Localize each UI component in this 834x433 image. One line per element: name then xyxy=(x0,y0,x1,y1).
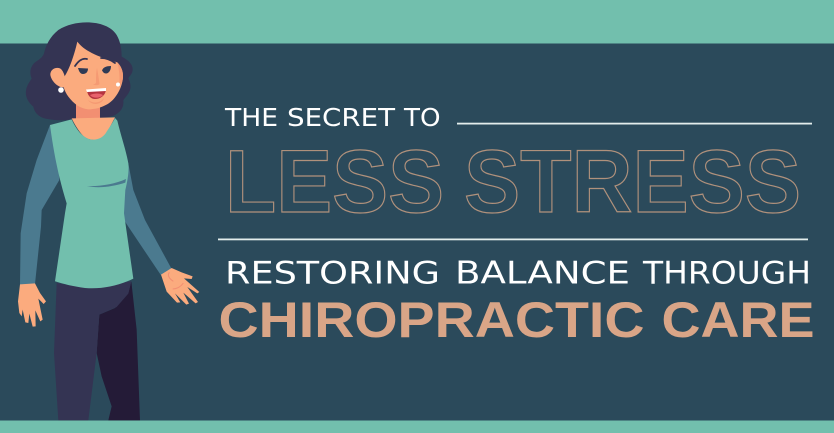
headline: the secret to xyxy=(224,103,440,132)
subheading: chiropractic care: CARE xyxy=(662,291,814,348)
subheading: restoring balance through: THROUGH xyxy=(642,256,811,292)
left hand xyxy=(18,283,46,327)
neck xyxy=(76,100,100,120)
tongue xyxy=(90,94,103,98)
subheading: chiropractic care: CHIROPRACTIC xyxy=(218,291,644,348)
right hand xyxy=(161,268,199,305)
bottom band xyxy=(0,420,834,433)
headline: the secret to: SECRET xyxy=(287,103,396,132)
headline: less stress xyxy=(225,131,801,231)
shirt xyxy=(50,118,133,288)
hair xyxy=(26,22,133,120)
subheading: chiropractic care xyxy=(218,291,814,348)
face xyxy=(63,42,123,109)
shirt fold xyxy=(87,179,126,187)
headline: the secret to: TO xyxy=(403,103,440,132)
nose xyxy=(93,68,100,85)
earrings xyxy=(58,82,120,93)
face details xyxy=(75,58,115,104)
illustration: woman presenting xyxy=(18,22,199,420)
pants xyxy=(54,281,140,420)
eyebrows xyxy=(75,58,115,66)
rule under the secret to xyxy=(457,123,812,124)
ear xyxy=(50,68,65,87)
eyes xyxy=(78,66,111,74)
top band xyxy=(0,0,834,44)
mouth xyxy=(87,90,106,99)
near arm sleeve xyxy=(20,125,59,285)
headline: less stress: LESS xyxy=(225,131,444,231)
headline: the secret to: THE xyxy=(224,103,278,132)
rule under less stress xyxy=(218,238,808,240)
subheading: restoring balance through xyxy=(225,256,811,292)
lower lip shadow xyxy=(88,98,104,104)
subheading: restoring balance through: RESTORING xyxy=(225,256,440,292)
teeth xyxy=(86,88,106,92)
headline: less stress: STRESS xyxy=(464,131,801,231)
subheading: restoring balance through: BALANCE xyxy=(455,256,630,292)
chest skin xyxy=(72,117,115,140)
far arm sleeve xyxy=(117,120,172,275)
